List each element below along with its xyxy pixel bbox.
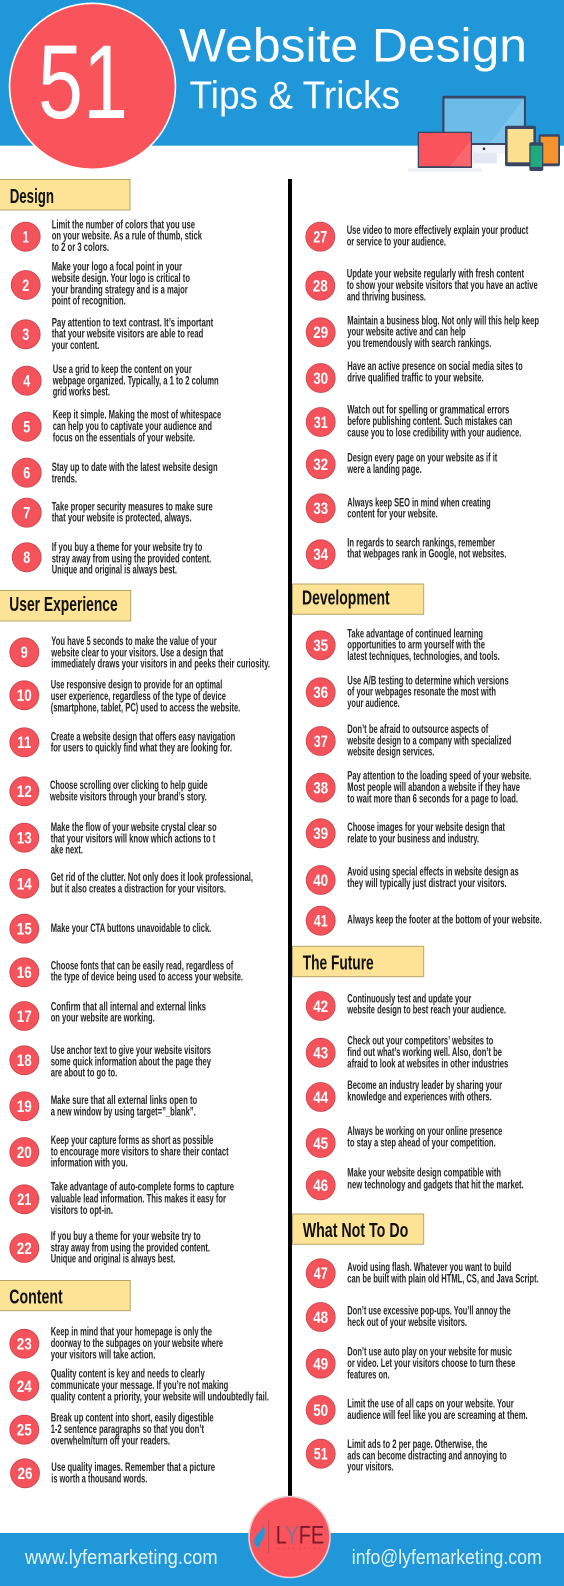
tip 42: Continuously test and update your <box>347 993 472 1005</box>
tip 25 <box>10 1413 214 1447</box>
tip 9: You have 5 seconds to make the value of your <box>51 636 217 648</box>
tip 22: 22 <box>17 1240 32 1258</box>
tip 31: 31 <box>314 414 328 432</box>
tip 26 <box>10 1459 215 1488</box>
tip 34: 34 <box>313 546 329 564</box>
tip 26: is worth a thousand words. <box>51 1473 147 1485</box>
tip 37: website design services. <box>347 747 434 759</box>
tip 42 <box>306 992 506 1020</box>
tip 20: to encourage more visitors to share their contact <box>51 1146 229 1158</box>
tip 1: to 2 or 3 colors. <box>52 242 109 254</box>
tip 38 <box>306 771 531 805</box>
heading: The Future <box>292 946 424 977</box>
tip 9 <box>10 636 270 671</box>
tip 1: Limit the number of colors that you use <box>52 219 195 231</box>
tip 21 <box>10 1182 234 1217</box>
tip 43 <box>306 1036 508 1070</box>
tip 6: Stay up to date with the latest website design <box>52 462 218 474</box>
tip 51: 51 <box>314 1446 328 1464</box>
tip 32 <box>306 450 497 479</box>
tip 8: If you buy a theme for your website try to <box>52 542 202 554</box>
tip 1: on your website. As a rule of thumb, stick <box>52 231 202 243</box>
logo badge: LYFE Marketing: MARKETING <box>277 1546 322 1550</box>
tip 33: 33 <box>313 500 328 518</box>
tip 19: Make sure that all external links open to <box>51 1095 197 1107</box>
tip 23: 23 <box>17 1336 32 1354</box>
tip 22: If you buy a theme for your website try to <box>51 1231 201 1243</box>
tip 37 <box>306 724 511 759</box>
title: Website Design <box>179 19 527 72</box>
heading: What Not To Do <box>292 1214 424 1244</box>
tip 19: 19 <box>17 1098 32 1116</box>
tip 10: (smartphone, tablet, PC) used to access the website. <box>51 702 240 714</box>
tip 7: Take proper security measures to make sure <box>52 501 213 513</box>
tip 7 <box>12 498 213 527</box>
tip 24: 24 <box>17 1378 32 1396</box>
tip 34: In regards to search rankings, remember <box>347 537 495 549</box>
tip 25: 1-2 sentence paragraphs so that you don’t <box>51 1424 204 1436</box>
tip 36: your audience. <box>347 698 400 710</box>
tip 14: but it also creates a distraction for your visitors. <box>51 883 226 895</box>
tip 20: 20 <box>17 1144 32 1162</box>
tip 11: for users to quickly find what they are looking for. <box>51 743 232 755</box>
tip 1 <box>11 219 202 254</box>
tip 14 <box>10 869 253 898</box>
tip 4: grid works best. <box>53 387 110 399</box>
tip 42: 42 <box>313 998 328 1016</box>
tip 30 <box>306 361 523 392</box>
tip 49: 49 <box>313 1356 328 1374</box>
tip 30: drive qualified traffic to your website. <box>347 372 484 384</box>
heading: Content <box>0 1280 130 1311</box>
tip 34 <box>306 537 506 569</box>
tip 39: 39 <box>313 825 328 843</box>
tip 45: 45 <box>313 1135 328 1153</box>
tip 20: Keep your capture forms as short as possible <box>51 1135 213 1147</box>
tip 23: Keep in mind that your homepage is only the <box>51 1327 212 1339</box>
tip 38: 38 <box>313 780 328 798</box>
title: Tips & Tricks <box>190 74 400 117</box>
tip 39 <box>306 819 505 848</box>
badge: 51: 51 <box>38 24 128 141</box>
tip 33: Always keep SEO in mind when creating <box>347 497 491 509</box>
tip 50 <box>306 1396 528 1424</box>
tip 3: your content. <box>52 340 99 352</box>
tip 26: 26 <box>18 1465 32 1483</box>
tip 13: ake next. <box>51 845 83 857</box>
tip 21: valuable lead information. This makes it easy for <box>51 1193 226 1205</box>
tip 27: or service to your audience. <box>347 236 446 248</box>
tip 32: 32 <box>313 456 328 474</box>
tip 10 <box>10 680 240 714</box>
heading: User Experience <box>0 590 131 621</box>
tip 40: 40 <box>313 872 328 890</box>
tip 15: 15 <box>17 920 32 938</box>
heading: Development <box>292 584 424 614</box>
tip 23: your visitors will take action. <box>51 1349 155 1361</box>
tip 6: trends. <box>52 473 77 485</box>
tip 16 <box>10 958 243 987</box>
heading: Development: Development <box>302 586 390 609</box>
tip 25: overwhelm/turn off your readers. <box>51 1435 170 1447</box>
tip 2: point of recognition. <box>52 296 126 308</box>
logo badge: LYFE Marketing: LYFE <box>276 1521 324 1549</box>
tip 30: 30 <box>313 370 328 388</box>
tip 33 <box>306 494 491 523</box>
tip 9: website clear to your visitors. Use a design that <box>51 647 223 659</box>
tip 2: Make your logo a focal point in your <box>52 262 182 274</box>
tip 4: Use a grid to keep the content on your <box>53 364 192 376</box>
tip 29: 29 <box>313 324 328 342</box>
heading: Design: Design <box>10 185 54 208</box>
tip 29: your website active and can help <box>347 327 466 339</box>
tip 35 <box>306 628 500 663</box>
tip 14: 14 <box>17 876 32 894</box>
tip 49 <box>306 1347 515 1381</box>
tip 4 <box>12 364 219 399</box>
tip 26: Use quality images. Remember that a picture <box>51 1462 215 1474</box>
tip 22 <box>10 1231 210 1266</box>
tip 36 <box>306 675 509 710</box>
tip 21: Take advantage of auto-complete forms to capture <box>51 1182 234 1194</box>
tip 5: focus on the essentials of your website. <box>53 432 195 444</box>
tip 21: 21 <box>17 1191 31 1209</box>
tip 28: and thriving business. <box>347 291 426 303</box>
tip 14: Get rid of the clutter. Not only does it look professional, <box>51 872 253 884</box>
tip 49: features on. <box>347 1369 390 1381</box>
tip 51 <box>306 1439 507 1474</box>
tip 17 <box>10 1001 206 1030</box>
tip 27: 27 <box>313 228 327 246</box>
tip 16: 16 <box>17 964 32 982</box>
tip 3: that your website visitors are able to read <box>52 329 203 341</box>
tip 47 <box>306 1259 539 1288</box>
tip 41: 41 <box>314 912 328 930</box>
tip 17: Confirm that all internal and external links <box>51 1001 206 1013</box>
tip 11 <box>10 728 235 757</box>
tip 22: Unique and original is always best. <box>51 1254 175 1266</box>
tip 48: 48 <box>313 1309 328 1327</box>
tip 3: Pay attention to text contrast. It’s important <box>52 317 213 329</box>
tip 48: heck out of your website visitors. <box>347 1317 467 1329</box>
tip 5: 5 <box>23 418 30 436</box>
tip 16: the type of device being used to access your website. <box>51 972 243 984</box>
tip 5: can help you to captivate your audience and <box>53 421 212 433</box>
tip 29 <box>306 315 539 350</box>
tip 28 <box>306 269 538 303</box>
tip 37: 37 <box>314 733 328 751</box>
heading: The Future: The Future <box>303 952 374 975</box>
tip 51: Limit ads to 2 per page. Otherwise, the <box>347 1439 487 1451</box>
tip 18: are about to go to. <box>51 1068 117 1080</box>
tip 44 <box>306 1080 502 1112</box>
tip 18: Use anchor text to give your website visitors <box>51 1045 211 1057</box>
tip 12: Choose scrolling over clicking to help guide <box>50 780 208 792</box>
tip 3: 3 <box>22 326 29 344</box>
header banner <box>0 0 564 146</box>
tip 2: website design. Your logo is critical to <box>51 273 190 285</box>
tip 3 <box>11 317 213 352</box>
heading: User Experience: User Experience <box>9 593 118 616</box>
tip 15 <box>10 914 211 943</box>
tip 2: 2 <box>22 277 29 295</box>
title <box>179 19 527 117</box>
tip 10: Use responsive design to provide for an optimal <box>51 680 222 692</box>
tip 17: 17 <box>17 1008 32 1026</box>
tip 16: Choose fonts that can be easily read, regardless of <box>51 960 233 972</box>
tip 7: 7 <box>23 504 30 522</box>
tip 33: content for your website. <box>347 509 438 521</box>
tip 5 <box>12 410 221 444</box>
heading: Content: Content <box>9 1286 63 1309</box>
heading: Design <box>0 180 130 210</box>
tip 10: 10 <box>17 687 32 705</box>
tip 32: were a landing page. <box>347 464 422 476</box>
tip 13: Make the flow of your website crystal clear so <box>51 822 217 834</box>
tip 25: 25 <box>17 1422 32 1440</box>
tip 19: a new window by using target=”_blank”. <box>51 1106 196 1118</box>
tip 20: information with you. <box>51 1158 128 1170</box>
tip 25: Break up content into short, easily digestible <box>51 1413 214 1425</box>
tip 50: 50 <box>313 1402 328 1420</box>
tip 39: relate to your business and industry. <box>347 833 479 845</box>
tip 47: 47 <box>314 1265 328 1283</box>
tip 40 <box>306 866 519 894</box>
tip 46: 46 <box>313 1177 328 1195</box>
tip 11: Create a website design that offers easy navigation <box>51 731 235 743</box>
heading: What Not To Do: What Not To Do <box>303 1219 408 1242</box>
tip 2: your branding strategy and is a major <box>52 284 188 296</box>
tip 27 <box>306 222 528 251</box>
tip 8: 8 <box>23 549 30 567</box>
tip 22: stray away from using the provided content. <box>51 1242 210 1254</box>
tip 41 <box>306 906 542 935</box>
tip 44: 44 <box>313 1089 329 1107</box>
tip 24 <box>10 1369 269 1404</box>
logo badge: LYFE Marketing <box>249 1496 330 1578</box>
tip 35: opportunities to arm yourself with the <box>347 640 485 652</box>
center divider line <box>288 179 292 1497</box>
tip 9: 9 <box>21 644 28 662</box>
tip 37: Don’t be afraid to outsource aspects of <box>347 724 488 736</box>
tip 44: knowledge and experiences with others. <box>347 1091 492 1103</box>
footer banner <box>0 1533 564 1586</box>
tip 20 <box>10 1135 229 1170</box>
tip 7: that your website is protected, always. <box>52 513 192 525</box>
footer website: www.lyfemarketing.com <box>24 1547 218 1569</box>
tip 48 <box>306 1302 511 1332</box>
tip 2 <box>11 262 190 308</box>
tip 12: 12 <box>17 783 32 801</box>
tip 1: 1 <box>23 228 29 246</box>
tip 31 <box>306 405 521 439</box>
tip 18: some quick information about the page they <box>51 1056 211 1068</box>
tip 5: Keep it simple. Making the most of whitespace <box>53 410 221 422</box>
tip 4: 4 <box>23 372 31 390</box>
tip 8: Unique and original is always best. <box>52 565 177 577</box>
tip 51: your visitors. <box>347 1462 394 1474</box>
tip 21: visitors to opt-in. <box>51 1205 113 1217</box>
tip 19 <box>10 1092 197 1121</box>
tip 17: on your website are working. <box>51 1013 155 1025</box>
tip 11: 11 <box>17 734 31 752</box>
icon: responsive devices <box>408 96 560 172</box>
tip 6: 6 <box>23 464 30 482</box>
tip 23: doorway to the subpages on your website where <box>51 1338 223 1350</box>
tip 35: 35 <box>313 637 328 655</box>
tip 29: you tremendously with search rankings. <box>347 338 491 350</box>
tip 36: 36 <box>313 684 328 702</box>
tip 28: 28 <box>313 278 328 296</box>
tip 46 <box>306 1168 524 1200</box>
tip 24: Quality content is key and needs to clearly <box>51 1369 205 1381</box>
tip 4: webpage organized. Typically, a 1 to 2 column <box>52 375 219 387</box>
tip 43: 43 <box>313 1044 328 1062</box>
tip 24: quality content a priority, your website will undoubtedly fail. <box>51 1392 269 1404</box>
tip 43: Check out your competitors’ websites to <box>347 1036 493 1048</box>
tip 18 <box>10 1045 211 1080</box>
tip 12: website visitors through your brand’s story. <box>49 791 207 803</box>
tip 13 <box>10 822 217 857</box>
tip 8 <box>12 542 211 577</box>
tip 18: 18 <box>17 1052 32 1070</box>
tip 15: Make your CTA buttons unavoidable to click. <box>51 923 211 935</box>
badge: 51 <box>10 3 176 169</box>
tip 24: communicate your message. If you’re not making <box>51 1380 228 1392</box>
footer email: info@lyfemarketing.com <box>352 1547 542 1569</box>
tip 12 <box>10 777 208 806</box>
tip 9: immediately draws your visitors in and peeks their curiosity. <box>51 659 270 671</box>
tip 45 <box>306 1126 502 1158</box>
tip 10: user experience, regardless of the type of device <box>51 691 226 703</box>
tip 35: Take advantage of continued learning <box>347 628 483 640</box>
tip 6 <box>12 458 218 487</box>
tip 13: 13 <box>17 830 32 848</box>
tip 8: stray away from using the provided content. <box>52 553 211 565</box>
tip 23 <box>10 1327 223 1361</box>
tip 13: that your visitors will know which actions to t <box>51 833 215 845</box>
